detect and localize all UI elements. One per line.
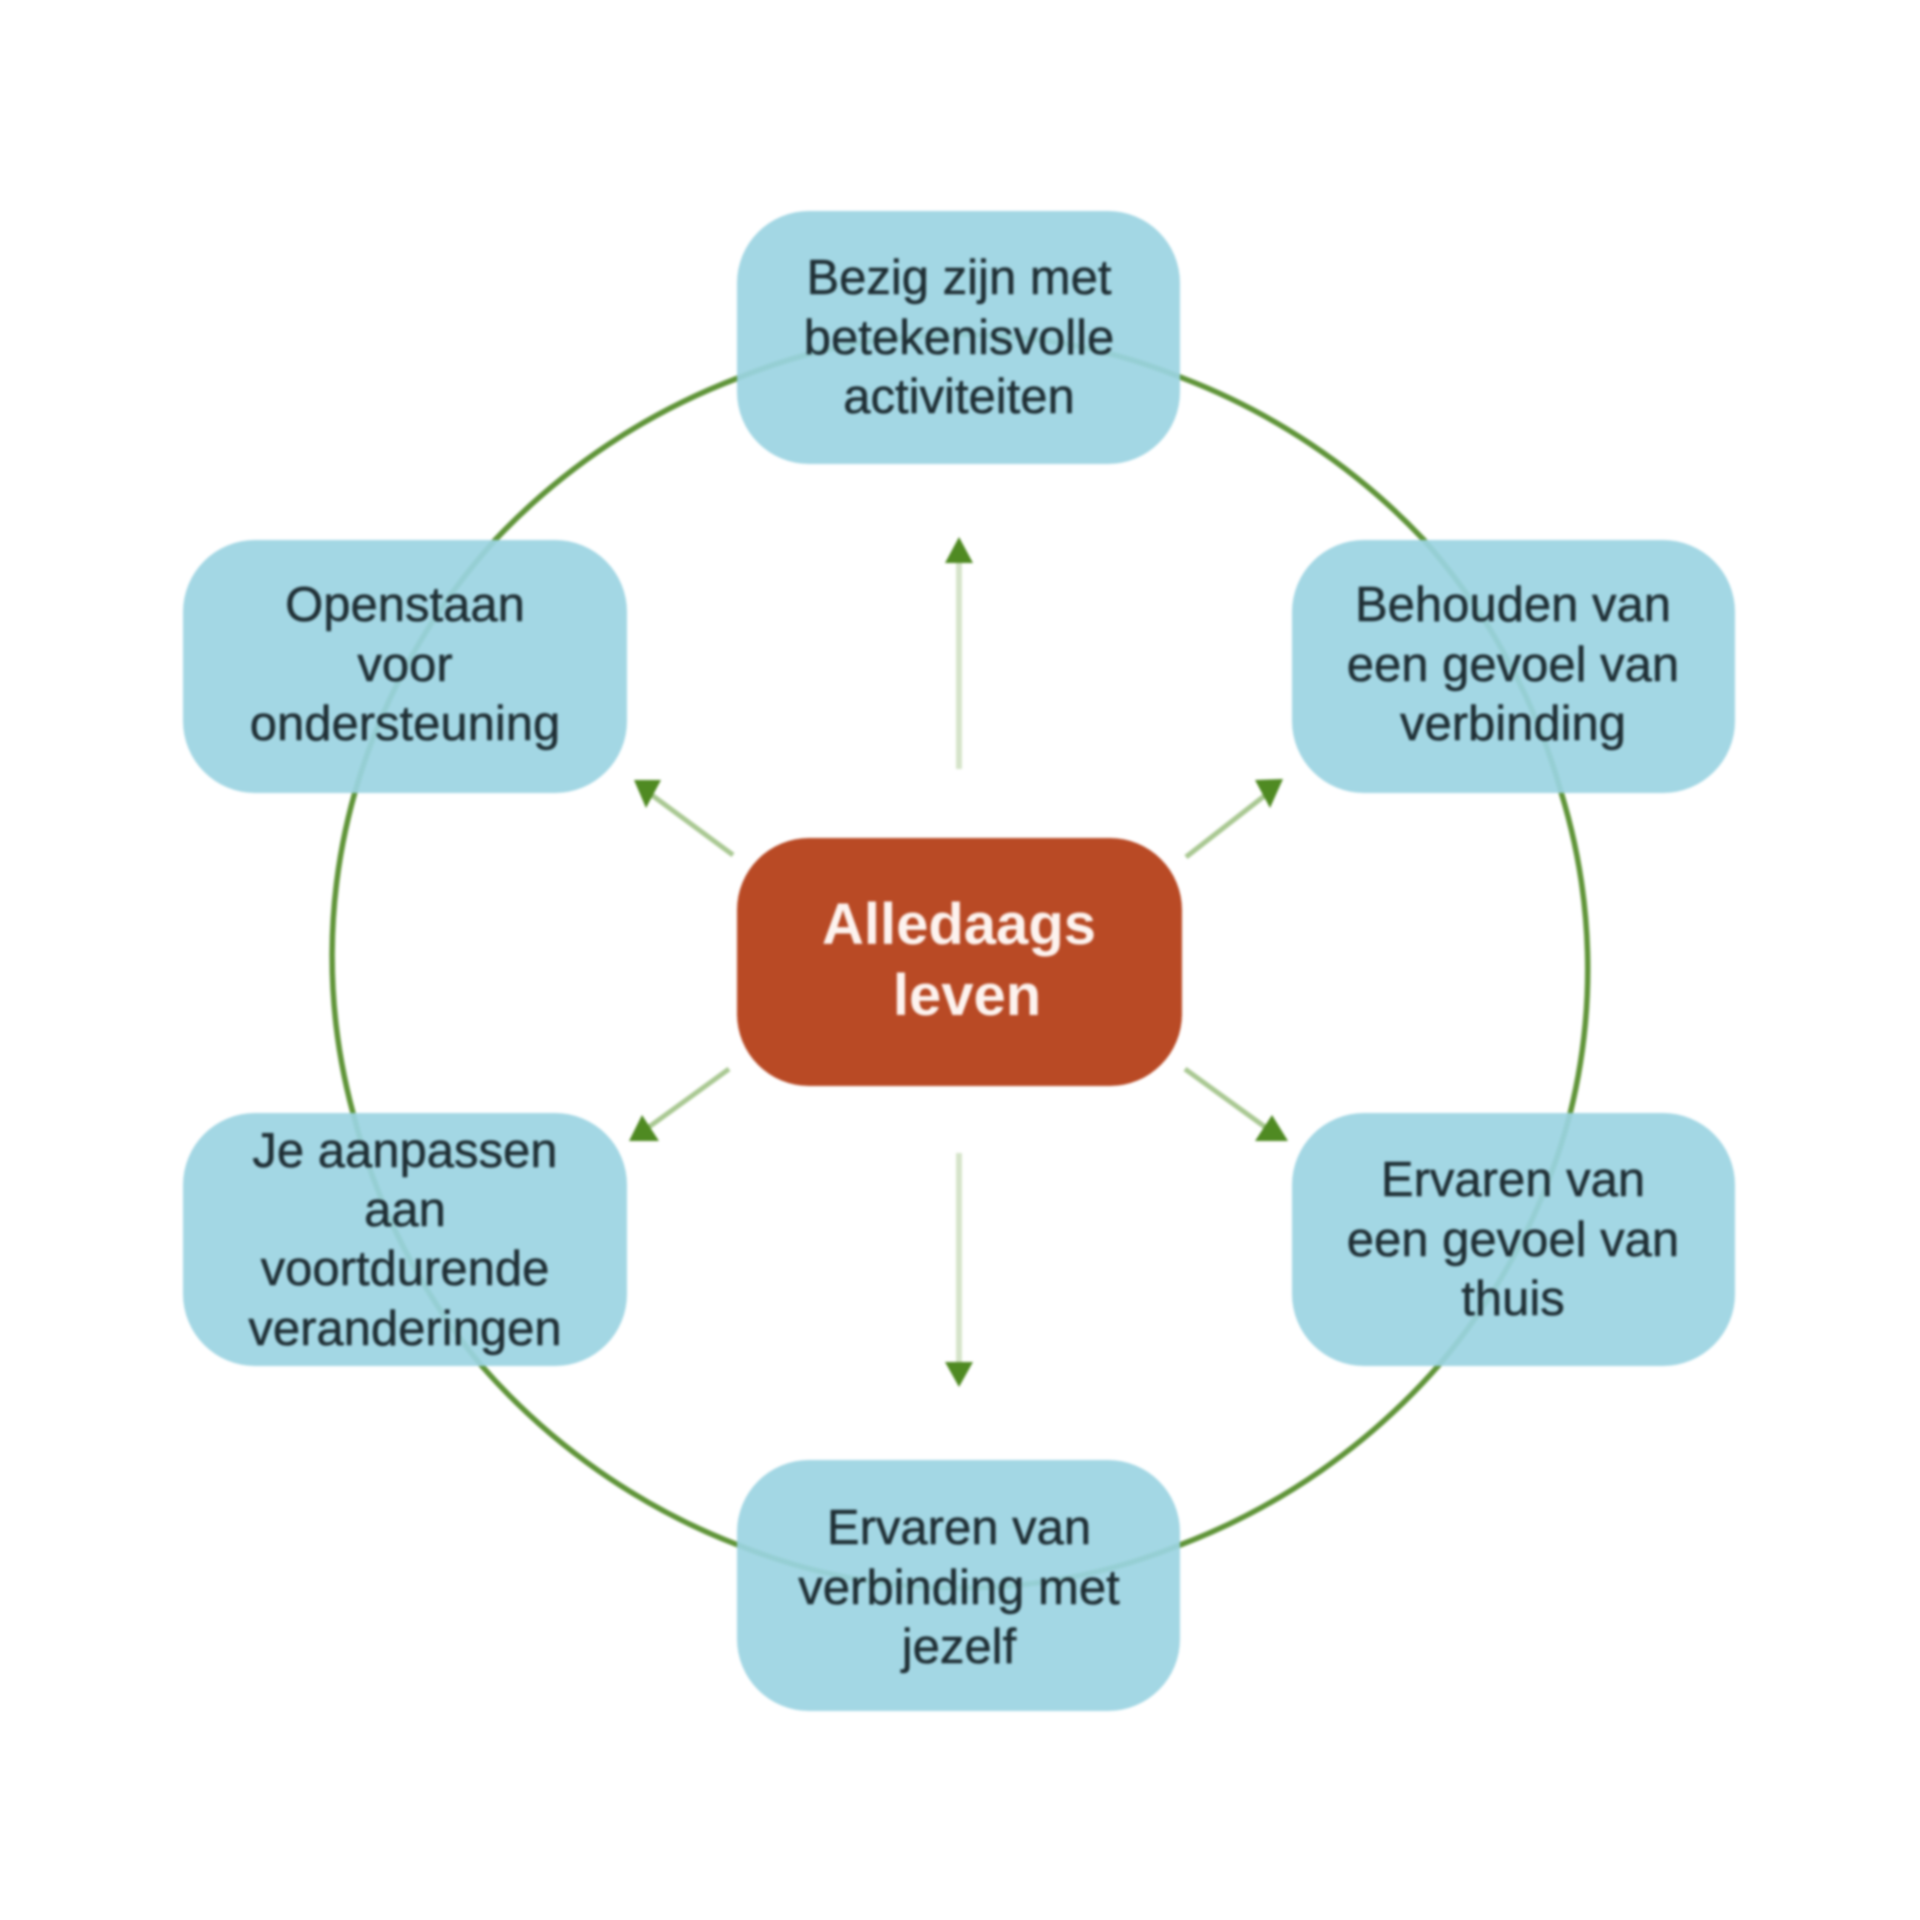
panel: lower left box: Je aanpassen	[252, 1124, 558, 1178]
panel: lower right box: een gevoel van	[1347, 1213, 1679, 1267]
panel: lower left box: aan	[364, 1183, 446, 1237]
panel: top box: activiteiten	[843, 370, 1075, 424]
panel: bottom box: verbinding met	[798, 1561, 1120, 1615]
panel: top box: Bezig zijn met	[806, 251, 1112, 305]
panel: upper left box	[183, 540, 627, 793]
panel: centre box: Alledaags	[822, 892, 1096, 957]
panel: upper right box	[1292, 540, 1735, 793]
arrow: centre to upper left	[634, 780, 733, 855]
arrow: centre to lower right	[1185, 1069, 1288, 1141]
green cycle ring	[332, 334, 1588, 1588]
panel: lower right box: Ervaren van	[1381, 1153, 1645, 1207]
arrow: centre to upper right	[1186, 779, 1283, 857]
panel: bottom box: jezelf	[900, 1620, 1017, 1674]
arrow: centre to lower left	[629, 1069, 729, 1141]
panel: top box	[737, 211, 1180, 464]
panel: upper right box: verbinding	[1400, 697, 1626, 751]
panel: bottom box: Ervaren van	[827, 1501, 1091, 1555]
panel: upper right box: Behouden van	[1355, 578, 1671, 632]
panel: lower right box: thuis	[1461, 1272, 1565, 1326]
panel: upper left box: ondersteuning	[250, 697, 560, 751]
panel: lower left box	[183, 1113, 627, 1366]
panel: upper left box: Openstaan	[285, 578, 525, 632]
panel: upper left box: voor	[357, 638, 453, 692]
panel: top box: betekenisvolle	[804, 311, 1114, 365]
panel: lower left box: voortdurende	[261, 1242, 549, 1296]
panel: lower right box	[1292, 1113, 1735, 1366]
panel: upper right box: een gevoel van	[1347, 638, 1679, 692]
arrow: centre to top	[945, 537, 973, 769]
panel: centre box	[737, 838, 1182, 1086]
panel: bottom box	[737, 1460, 1180, 1711]
panel: centre box: leven	[893, 963, 1041, 1028]
panel: lower left box: veranderingen	[248, 1302, 562, 1356]
arrow: centre to bottom	[945, 1153, 973, 1387]
